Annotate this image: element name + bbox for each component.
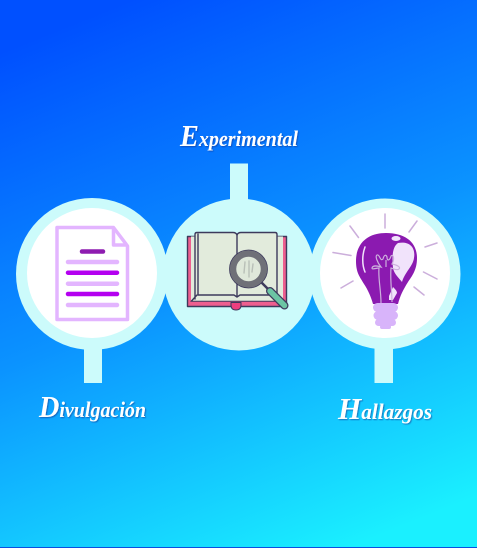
connector stem top <box>230 164 248 208</box>
panel: hallazgos <box>310 198 460 426</box>
connector stem left <box>84 340 102 383</box>
ring right <box>310 198 460 350</box>
label: Divulgación: Divulgación <box>38 389 146 424</box>
magnifier <box>262 283 270 291</box>
reflection <box>393 243 414 282</box>
disc centre <box>163 198 315 350</box>
icon: document <box>57 228 128 320</box>
icon: light bulb <box>333 214 437 329</box>
label: Hallazgos: Hallazgos <box>337 391 432 426</box>
white disc right <box>320 208 450 338</box>
connector stem right <box>374 340 393 383</box>
rays <box>333 214 437 295</box>
pages <box>191 232 283 302</box>
white disc left <box>27 208 157 338</box>
icon: book with magnifier <box>188 232 286 310</box>
ring left <box>16 198 168 350</box>
cover <box>188 236 286 306</box>
panel: divulgación <box>16 198 168 424</box>
panel: experimental <box>163 118 315 350</box>
label: Experimental: Experimental <box>179 118 299 153</box>
filament <box>372 255 400 303</box>
glass <box>356 233 417 304</box>
base <box>373 303 398 312</box>
